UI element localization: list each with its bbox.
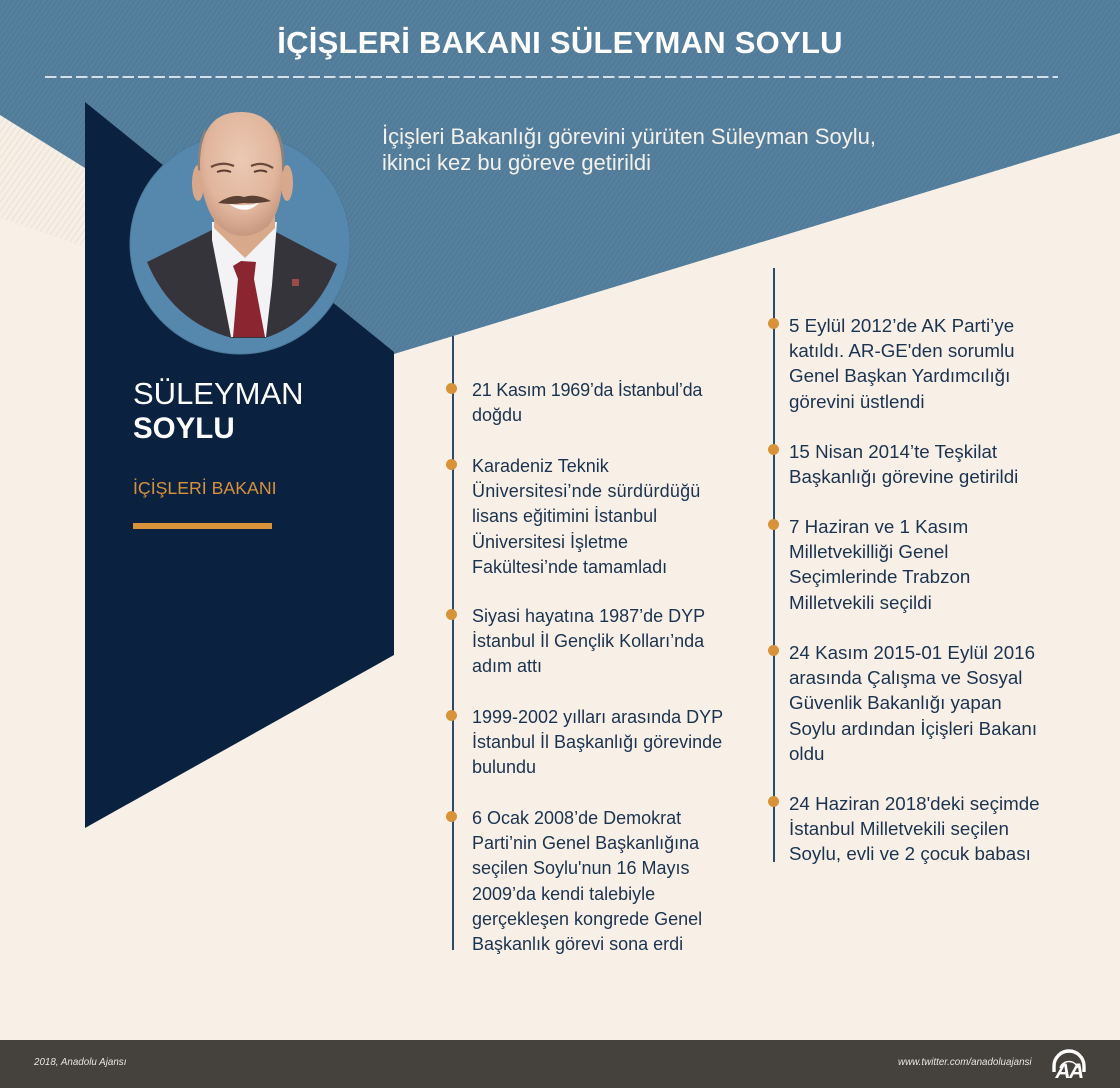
item: AK Parti xyxy=(768,315,1015,412)
shirt xyxy=(212,222,277,337)
item: Demokrat Parti: 2009’da kendi talebiyle xyxy=(472,884,655,904)
item: ministry: Güvenlik Bakanlığı yapan xyxy=(789,692,1002,713)
title: İÇİŞLERİ BAKANI SÜLEYMAN SOYLU xyxy=(277,25,843,60)
item: education: lisans eğitimini İstanbul xyxy=(472,506,657,526)
item: 2018: İstanbul Milletvekili seçilen xyxy=(789,818,1009,839)
item: politics: Siyasi hayatına 1987’de DYP xyxy=(472,606,705,626)
timeline: left column xyxy=(446,336,723,954)
portrait illustration xyxy=(130,112,350,354)
neck xyxy=(214,205,275,258)
item: 2014: Başkanlığı görevine getirildi xyxy=(789,466,1018,487)
item: ministry: arasında Çalışma ve Sosyal xyxy=(789,667,1022,688)
item: education: Fakültesi’nde tamamladı xyxy=(472,557,667,577)
item: birth: 21 Kasım 1969’da İstanbul’da xyxy=(472,380,702,400)
item: 2015 elections: Seçimlerinde Trabzon xyxy=(789,566,970,587)
item: AK Parti: Genel Başkan Yardımcılığı xyxy=(789,365,1010,386)
item: AK Parti: katıldı. AR-GE'den sorumlu xyxy=(789,340,1015,361)
jacket xyxy=(147,230,337,338)
brows and eyes xyxy=(211,164,273,168)
subtitle: ikinci kez bu göreve getirildi xyxy=(382,150,651,175)
item: Demokrat Parti: Parti’nin Genel Başkanlığına xyxy=(472,833,699,853)
hair xyxy=(198,128,284,172)
item: education: Üniversitesi’nde sürdürdüğü xyxy=(472,481,701,501)
item: 2018: Soylu, evli ve 2 çocuk babası xyxy=(789,843,1031,864)
moustache and smile xyxy=(218,196,271,204)
item: Demokrat Parti xyxy=(446,808,702,954)
footer xyxy=(0,1040,1120,1088)
item: Demokrat Parti: 6 Ocak 2008’de Demokrat xyxy=(472,808,681,828)
item: ministry xyxy=(768,642,1037,764)
item: 2018: 24 Haziran 2018'deki seçimde xyxy=(789,793,1040,814)
AA logo xyxy=(1052,1049,1086,1080)
item: birth xyxy=(446,380,702,425)
pin xyxy=(292,279,299,286)
item: 2014: 15 Nisan 2014’te Teşkilat xyxy=(789,441,997,462)
item: birth: doğdu xyxy=(472,405,522,425)
item: AK Parti: görevini üstlendi xyxy=(789,391,924,412)
item: 2018 xyxy=(768,793,1040,864)
item: politics: adım attı xyxy=(472,656,542,676)
item: Demokrat Parti: gerçekleşen kongrede Genel xyxy=(472,909,702,929)
item: DYP: İstanbul İl Başkanlığı görevinde xyxy=(472,732,722,752)
head xyxy=(200,112,282,236)
item: politics: İstanbul İl Gençlik Kolları’nda xyxy=(472,631,704,651)
item: 2015 elections: Milletvekilliği Genel xyxy=(789,541,948,562)
ears xyxy=(192,165,204,201)
role label: İÇİŞLERİ BAKANI xyxy=(133,478,277,498)
item: Demokrat Parti: seçilen Soylu'nun 16 Mayıs xyxy=(472,858,690,878)
item: 2014 xyxy=(768,441,1018,487)
subtitle xyxy=(382,124,876,175)
item: 2015 elections xyxy=(768,516,970,613)
item: 2015 elections: 7 Haziran ve 1 Kasım xyxy=(789,516,968,537)
item: 2015 elections: Milletvekili seçildi xyxy=(789,592,932,613)
footer url: www.twitter.com/anadoluajansi xyxy=(898,1057,1032,1068)
footer credit: 2018, Anadolu Ajansı xyxy=(34,1057,126,1068)
subtitle: İçişleri Bakanlığı görevini yürüten Süleyman Soylu, xyxy=(382,124,876,149)
role underline xyxy=(133,523,272,529)
item: DYP: bulundu xyxy=(472,757,536,777)
item: ministry: oldu xyxy=(789,743,824,764)
tie xyxy=(233,261,265,337)
item: education: Üniversitesi İşletme xyxy=(472,532,628,552)
item: AK Parti: 5 Eylül 2012’de AK Parti’ye xyxy=(789,315,1014,336)
item: DYP xyxy=(446,707,723,777)
item: Demokrat Parti: Başkanlık görevi sona erdi xyxy=(472,934,683,954)
item: ministry: Soylu ardından İçişleri Bakanı xyxy=(789,718,1037,739)
name: SÜLEYMAN xyxy=(133,376,304,411)
item: ministry: 24 Kasım 2015-01 Eylül 2016 xyxy=(789,642,1035,663)
item: education xyxy=(446,456,701,577)
item: politics xyxy=(446,606,705,676)
item: DYP: 1999-2002 yılları arasında DYP xyxy=(472,707,723,727)
name: SOYLU xyxy=(133,412,235,445)
item: education: Karadeniz Teknik xyxy=(472,456,609,476)
timeline: right column xyxy=(768,268,1040,864)
name xyxy=(133,376,304,445)
